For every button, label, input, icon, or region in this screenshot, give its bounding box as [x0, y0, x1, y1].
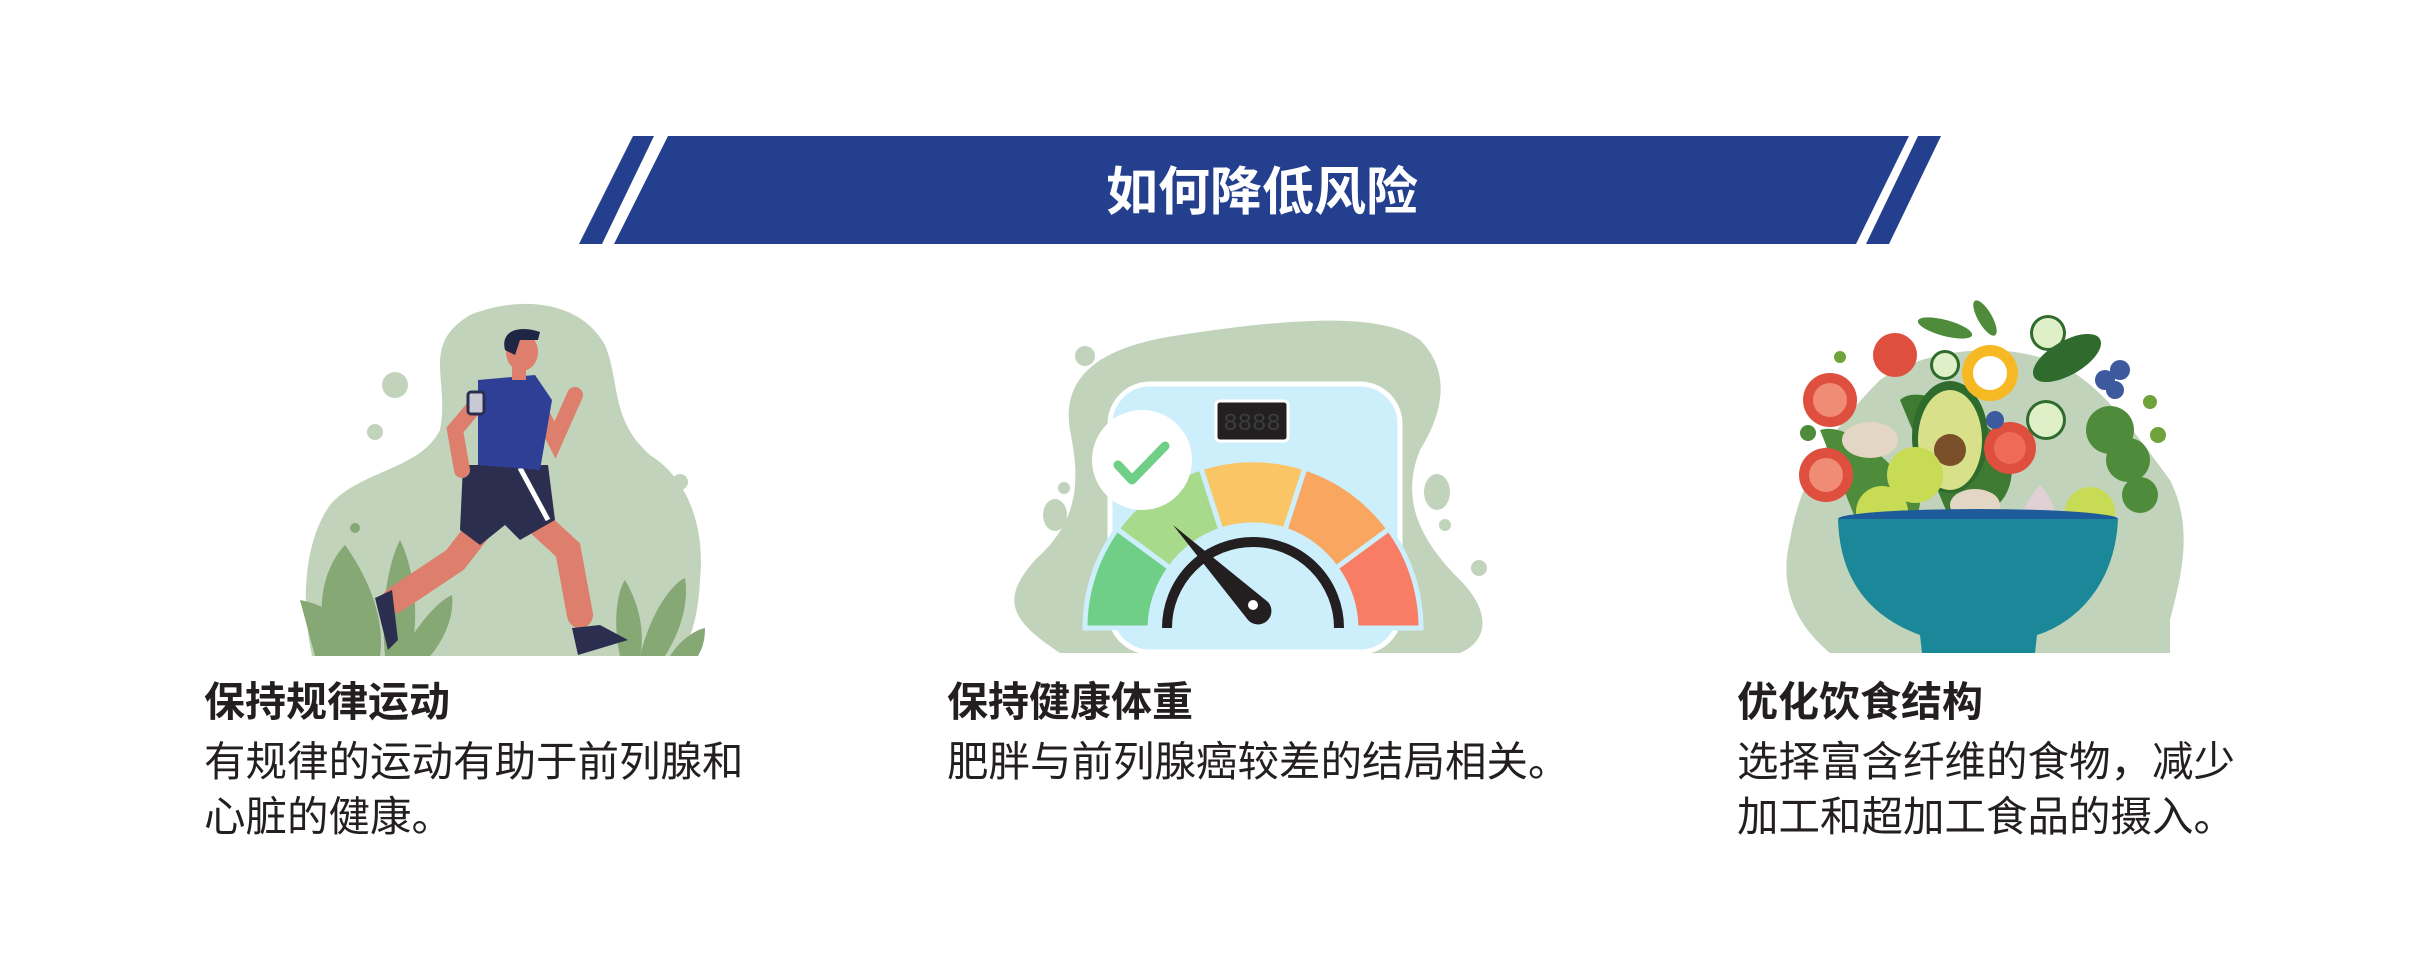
head	[512, 360, 526, 380]
icon: scale gauge	[1014, 320, 1487, 653]
needle	[1173, 525, 1271, 624]
bowl	[1838, 509, 2118, 529]
display	[1216, 401, 1288, 441]
heading: exercise: 保持规律运动	[204, 679, 450, 725]
banner	[579, 136, 1941, 244]
icon: scale gauge: 8888	[1223, 411, 1281, 438]
heading: weight: 保持健康体重	[947, 679, 1193, 725]
arms	[455, 395, 575, 470]
heading: diet: 优化饮食结构	[1737, 679, 1983, 725]
veggies	[1799, 297, 2166, 548]
plants	[300, 540, 705, 656]
check badge	[1092, 410, 1192, 510]
text: exercise: 心脏的健康。	[204, 793, 453, 840]
text: exercise: 有规律的运动有助于前列腺和	[204, 738, 744, 785]
icon: runner	[300, 304, 705, 656]
text: diet	[1737, 738, 2235, 840]
text: exercise	[204, 738, 744, 840]
torso	[478, 375, 552, 470]
gauge segments	[1085, 460, 1421, 628]
icon: salad bowl	[1786, 300, 2184, 653]
banner: 如何降低风险	[1106, 164, 1418, 222]
text: weight: 肥胖与前列腺癌较差的结局相关。	[947, 738, 1570, 785]
shoes	[375, 590, 398, 650]
text: diet: 选择富含纤维的食物，减少	[1737, 738, 2235, 785]
text: diet: 加工和超加工食品的摄入。	[1737, 793, 2235, 840]
legs	[395, 515, 580, 615]
